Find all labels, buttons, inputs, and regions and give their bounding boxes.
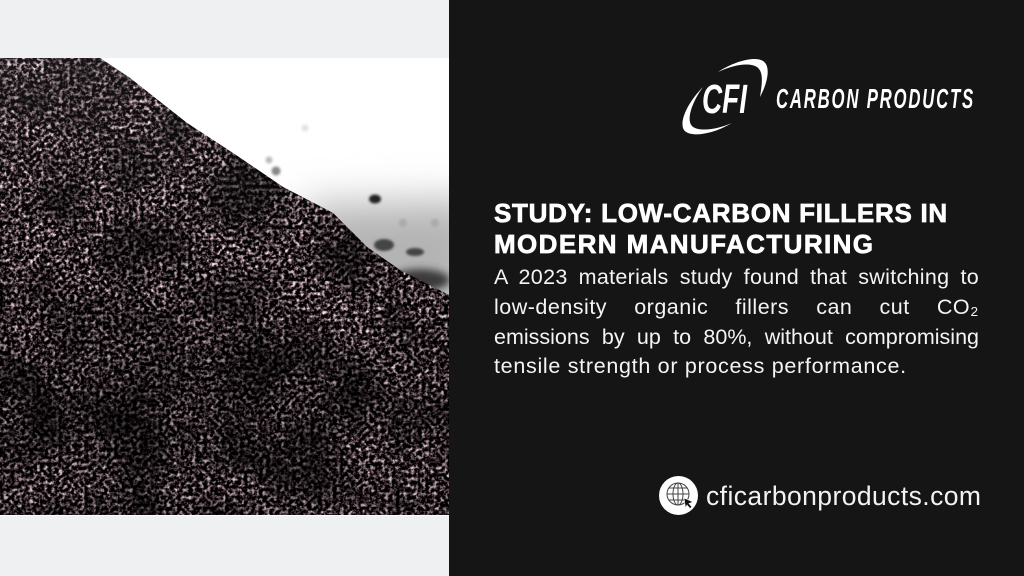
heading: STUDY: LOW-CARBON FILLERS IN — [494, 198, 948, 228]
icon: globe with cursor — [659, 476, 698, 515]
body text: emissions by up to 80%, without compromising — [494, 325, 979, 349]
photo: carbon powder pile on white background — [0, 0, 449, 576]
heading: MODERN MANUFACTURING — [494, 229, 874, 259]
textured white backdrop — [0, 0, 449, 576]
logo swoosh ring — [682, 59, 768, 134]
website link — [659, 476, 981, 515]
airborne particles — [266, 124, 450, 291]
body text: A 2023 materials study found that switching to — [494, 265, 979, 289]
website address: cficarbonproducts.com — [706, 481, 981, 511]
logo monogram: CFI — [702, 76, 748, 122]
dark content panel — [449, 0, 1024, 576]
body text — [494, 265, 979, 378]
misty haze near pile foot — [297, 178, 449, 295]
heading — [494, 198, 948, 259]
powder pile — [0, 50, 449, 520]
logo: CFI Carbon Products — [682, 59, 975, 134]
white photo background — [0, 58, 449, 516]
body text: tensile strength or process performance. — [494, 354, 907, 378]
body text: low-density organic fillers can cut CO₂ — [494, 295, 979, 319]
